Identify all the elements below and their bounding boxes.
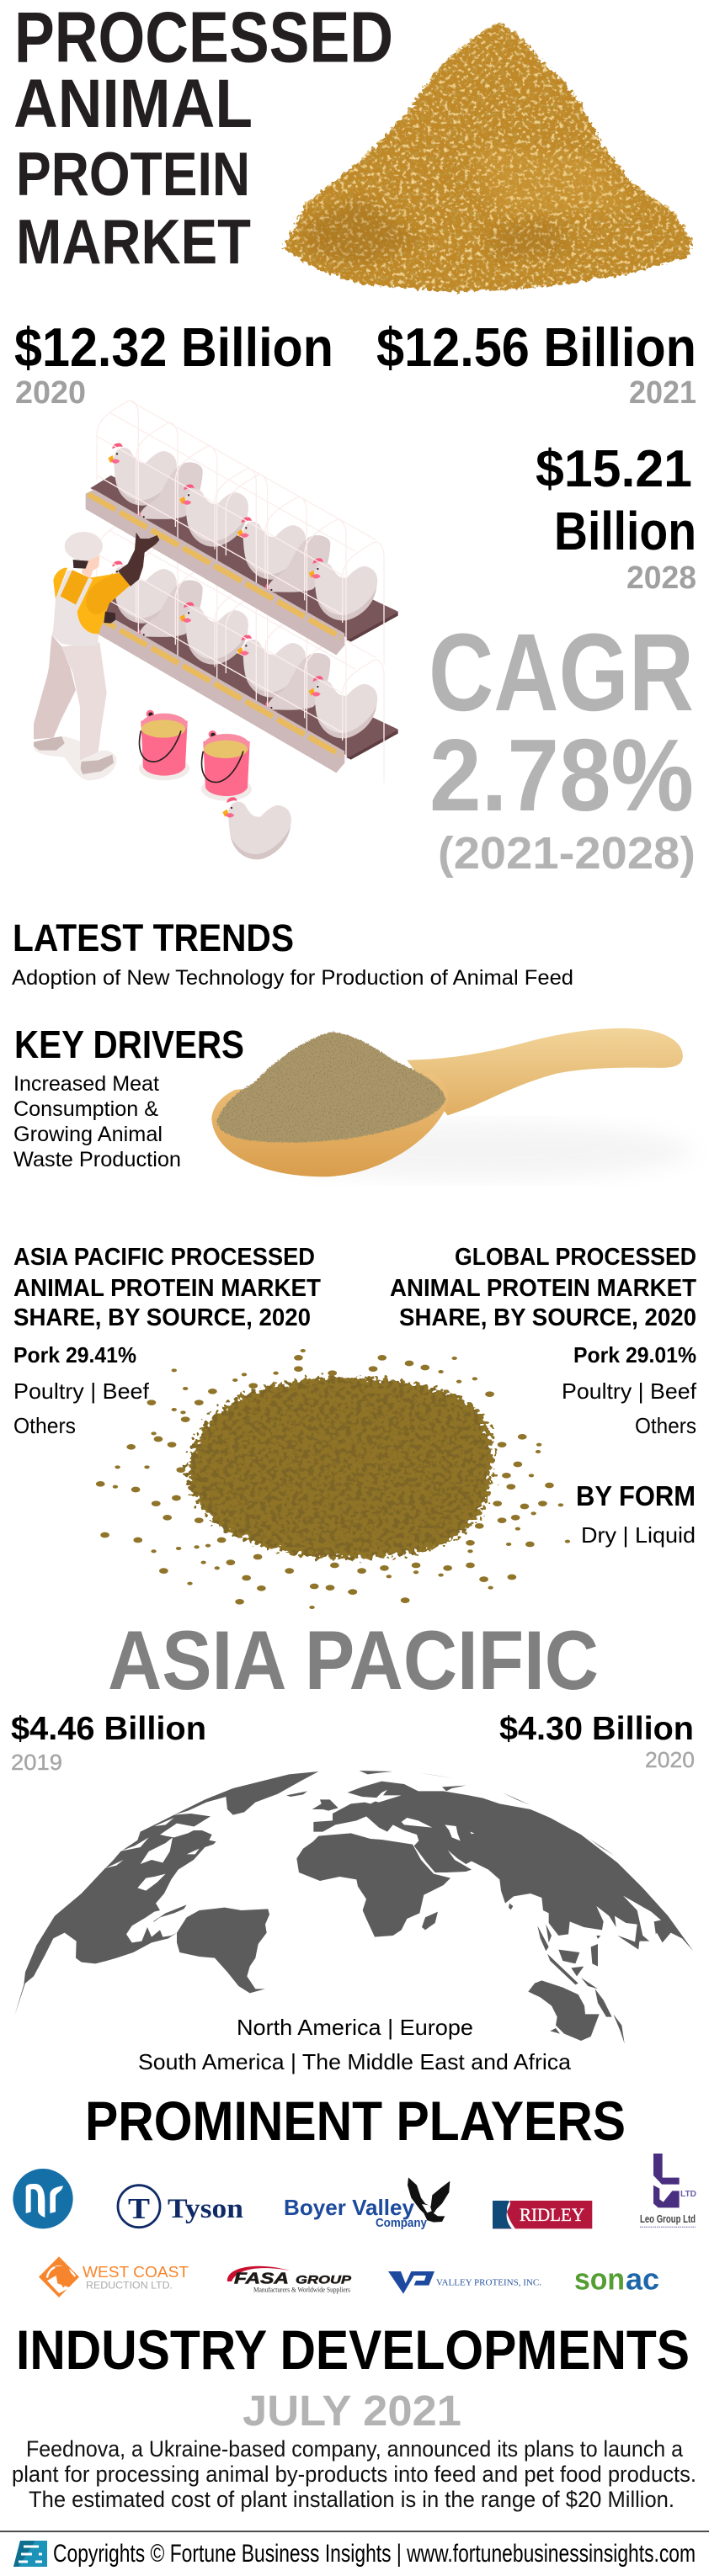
year 2020: 2020 (15, 375, 86, 411)
Cuba and Caribbean (153, 1904, 187, 1921)
date: July 2021: JULY 2021 (243, 2387, 461, 2435)
logo: Tyson (118, 2186, 243, 2228)
Eurasia (313, 1782, 693, 1951)
driver text: Consumption & (13, 1097, 158, 1121)
title (13, 0, 393, 277)
logo: Sonac (574, 2262, 659, 2297)
feed bucket 1 (139, 710, 189, 780)
image: wooden spoon with powder (211, 1028, 692, 1180)
CAGR period: (2021-2028) (438, 828, 696, 879)
logo: FASA Group (227, 2266, 352, 2294)
logo: FASA Group: FASA (234, 2270, 289, 2287)
year 2020: 2020 (645, 1747, 695, 1772)
driver text: Increased Meat (13, 1072, 159, 1096)
logo: Boyer Valley Company (284, 2177, 450, 2230)
logo: Ridley (493, 2201, 592, 2228)
Global share heading: SHARE, BY SOURCE, 2020 (399, 1304, 696, 1331)
logo: Tyson: Tyson (168, 2194, 243, 2224)
world map globe (14, 1771, 693, 2043)
other regions text (138, 2015, 572, 2074)
source list: Asia Pacific: Pork 29.41% (13, 1342, 136, 1368)
Asia Pacific share heading: ASIA PACIFIC PROCESSED (13, 1244, 315, 1271)
source list: Global: Pork 29.01% (573, 1342, 696, 1368)
development text: The estimated cost of plant installation is in the range of $20 Million. (29, 2487, 674, 2512)
title line: MARKET: MARKET (16, 206, 251, 277)
Japan and Kuril arc (617, 1925, 665, 1950)
logo: Valley Proteins (388, 2271, 541, 2294)
Global share heading (390, 1244, 696, 1331)
logo: Boyer Valley Company: Company (376, 2216, 428, 2230)
Asia Pacific share heading: ANIMAL PROTEIN MARKET (13, 1275, 321, 1302)
driver text: Waste Production (13, 1148, 181, 1171)
illustration: poultry farm worker feeding hens (34, 401, 398, 859)
Southeast Asia islands (509, 1904, 625, 2043)
region heading: Asia Pacific: ASIA PACIFIC (108, 1613, 599, 1707)
Africa (296, 1833, 450, 1937)
year 2019: 2019 (11, 1750, 62, 1775)
source list: Asia Pacific (13, 1342, 150, 1438)
by form: Dry | Liquid (581, 1522, 696, 1548)
stat: 2028 value: $15.21 (536, 440, 692, 498)
source list: Asia Pacific: Poultry | Beef (13, 1378, 150, 1404)
stat: 2021 value (376, 316, 696, 411)
stat: 2020 region value (499, 1711, 695, 1772)
logo: Leo Group (640, 2154, 696, 2227)
heading: Prominent Players: PROMINENT PLAYERS (85, 2090, 626, 2152)
trend text: Adoption of New Technology for Production of Animal Feed (12, 966, 573, 990)
upper hen shelf (86, 401, 398, 665)
stat: 2020 value (14, 316, 333, 411)
logo: West Coast Reduction (39, 2256, 189, 2297)
latest trends: LATEST TRENDS (13, 916, 294, 959)
stat: 2028 value (536, 440, 696, 596)
other regions text: North America | Europe (237, 2015, 473, 2040)
logo: FASA Group: Manufacturers & Worldwide Suppliers (253, 2287, 350, 2294)
title line: PROTEIN: PROTEIN (16, 141, 250, 209)
stat: 2020 region value: $4.30 Billion (499, 1711, 694, 1747)
other regions text: South America | The Middle East and Africa (138, 2049, 572, 2074)
Arctic band and Greenland (174, 1771, 318, 1815)
logo: Valley Proteins: VALLEY PROTEINS, INC. (436, 2279, 541, 2288)
key drivers (13, 1022, 244, 1171)
Global share heading: ANIMAL PROTEIN MARKET (390, 1275, 696, 1302)
Arctic islands (360, 1771, 615, 1856)
logo: West Coast Reduction: WEST COAST (83, 2264, 189, 2281)
Madagascar (422, 1912, 438, 1930)
latest trends (12, 916, 573, 990)
feed bucket 2 (201, 730, 252, 801)
by form (576, 1480, 696, 1548)
year 2028: 2028 (626, 560, 696, 596)
Asia Pacific share heading (13, 1244, 321, 1331)
year 2021: 2021 (629, 375, 696, 411)
driver text (13, 1072, 181, 1171)
image: golden protein meal pile (283, 23, 692, 292)
Iceland (286, 1791, 307, 1797)
North America (14, 1814, 216, 2016)
logo: Sonac: ac (626, 2262, 659, 2297)
logo: West Coast Reduction: REDUCTION LTD. (86, 2279, 173, 2291)
logo: Tyson: T (128, 2192, 150, 2225)
worker (34, 532, 159, 780)
eagle mark (408, 2177, 450, 2223)
logo: Leo Group: LTD (680, 2190, 696, 2199)
feed buckets and hen (139, 710, 291, 859)
by form: BY FORM (576, 1480, 696, 1511)
CAGR callout (429, 610, 696, 879)
standalone hen (222, 797, 291, 859)
British Isles (312, 1799, 339, 1811)
driver text: Growing Animal (13, 1123, 163, 1146)
footer logo (13, 2541, 47, 2567)
Americas and Greenland (14, 1771, 318, 2016)
stat: 2019 region value: $4.46 Billion (11, 1711, 206, 1747)
logo: Nf (13, 2169, 73, 2228)
stat: 2019 region value (11, 1711, 206, 1775)
title line: ANIMAL: ANIMAL (13, 66, 253, 142)
South America (177, 1908, 269, 1993)
Hudson Bay and lakes (105, 1818, 200, 1891)
Australia (528, 1980, 600, 2041)
inland seas (373, 1790, 661, 1942)
development text (12, 2436, 696, 2512)
logo: Sonac: son (574, 2262, 625, 2297)
logo: Boyer Valley Company: Boyer Valley (284, 2195, 415, 2220)
lower hen shelf (86, 518, 398, 783)
logo: Ridley: RIDLEY (520, 2204, 584, 2225)
source list: Global (562, 1342, 697, 1438)
image: pellet pile (100, 1351, 568, 1607)
stat: 2020 value: $12.32 Billion (14, 316, 333, 378)
source list: Global: Others (635, 1413, 696, 1438)
source list: Asia Pacific: Others (13, 1413, 76, 1438)
key drivers: KEY DRIVERS (14, 1022, 244, 1066)
footer divider (0, 2531, 709, 2532)
Old World (296, 1771, 693, 2043)
title line: PROCESSED: PROCESSED (14, 0, 393, 77)
logo: FASA Group: GROUP (296, 2272, 352, 2286)
source list: Global: Poultry | Beef (562, 1378, 697, 1404)
Asia Pacific share heading: SHARE, BY SOURCE, 2020 (13, 1304, 311, 1331)
